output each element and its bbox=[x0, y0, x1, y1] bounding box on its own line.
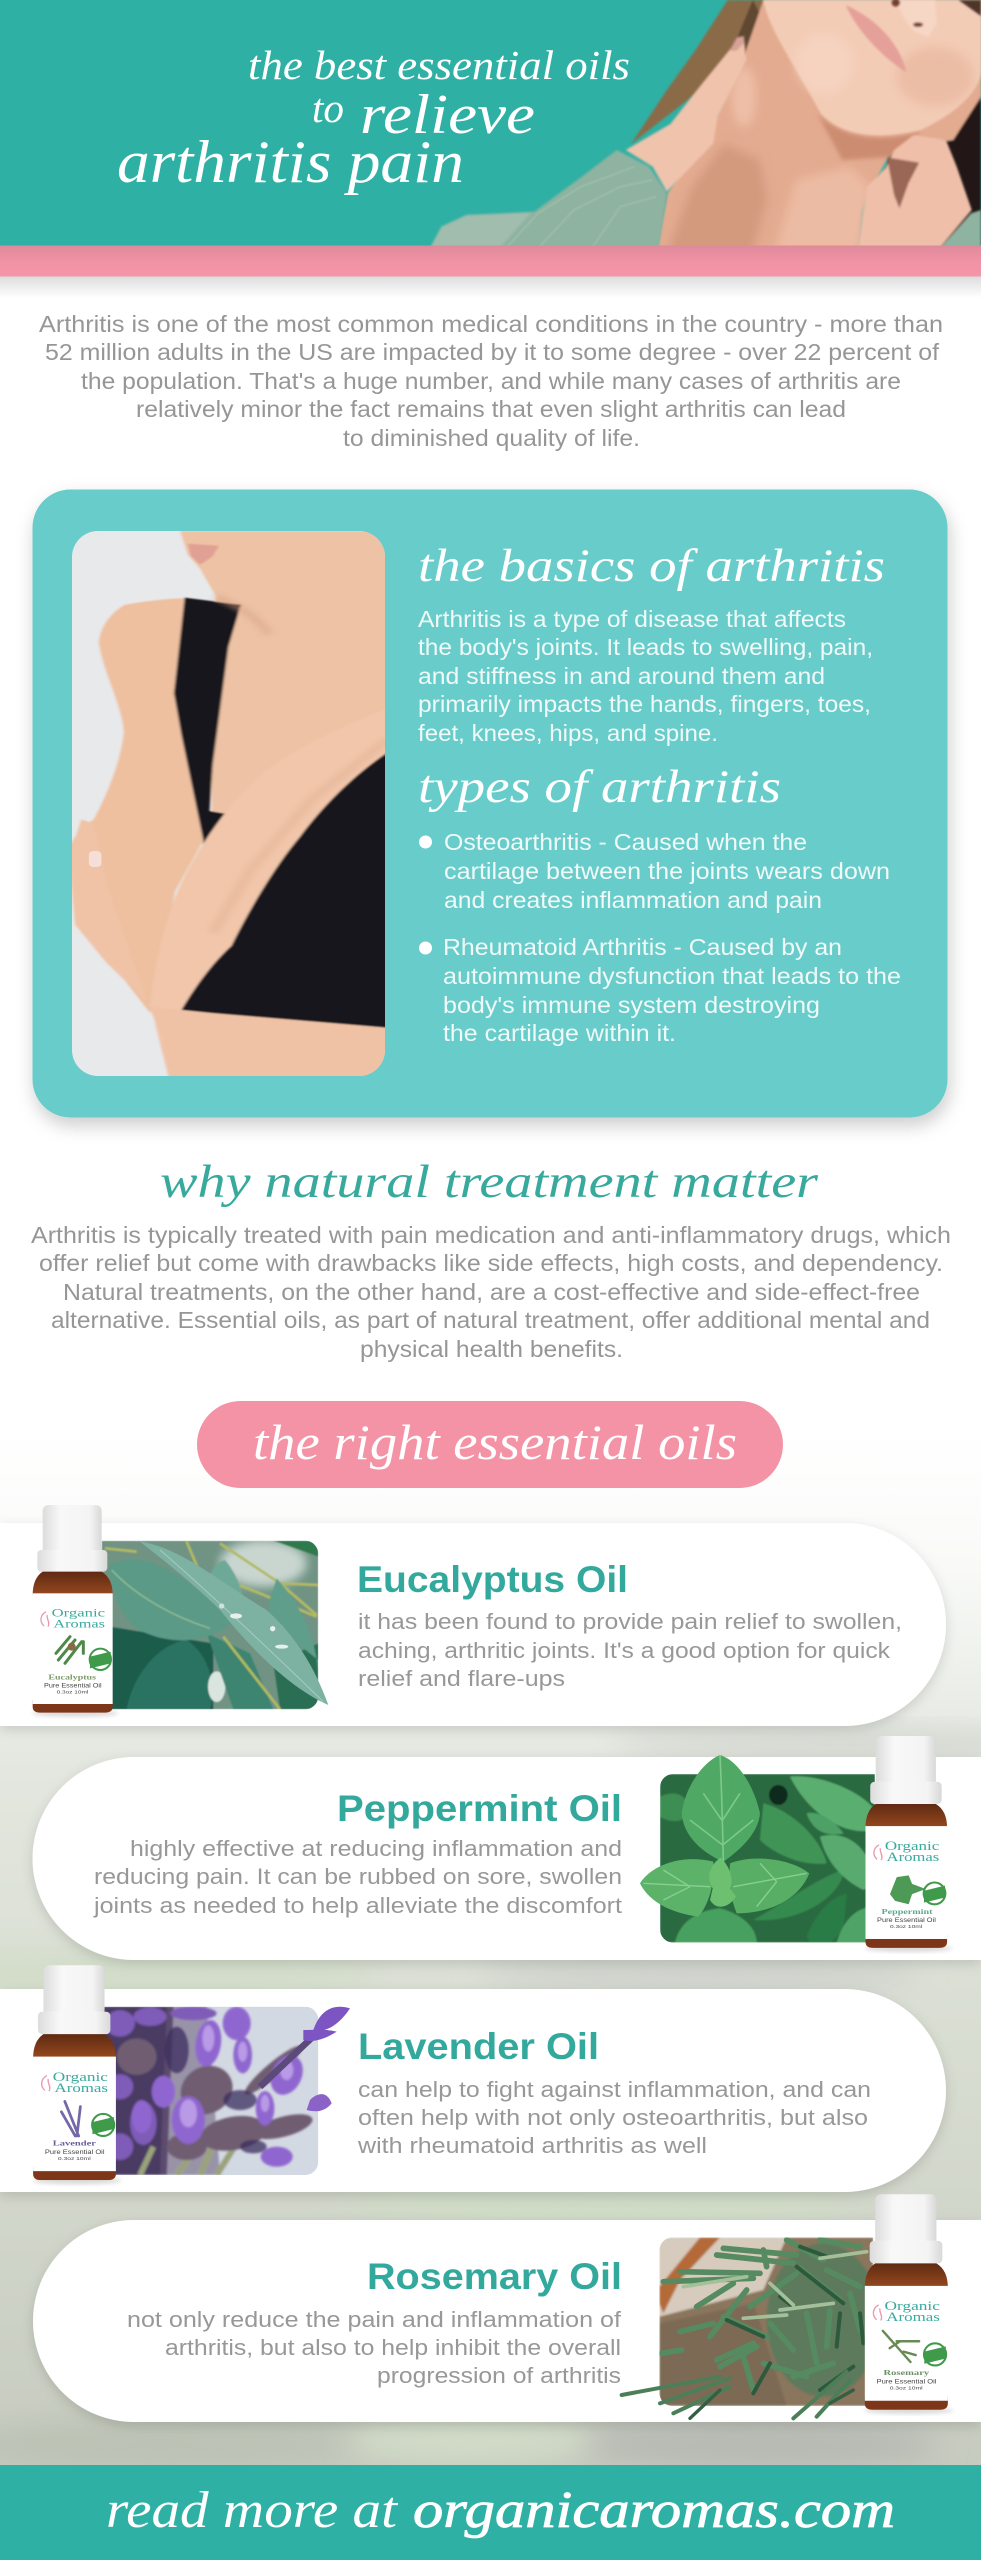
heading: the basics of arthritis: the basics of arthritis bbox=[418, 540, 885, 592]
description: eucalyptus oil: it has been found to provide pain relief to swollen, bbox=[358, 1609, 902, 1634]
bottle: eucalyptus: Pure Essential Oil bbox=[44, 1682, 102, 1689]
title: eucalyptus oil: Eucalyptus Oil bbox=[357, 1559, 628, 1600]
description: rosemary oil: arthritis, but also to help inhibit the overall bbox=[165, 2335, 621, 2360]
basics paragraph: feet, knees, hips, and spine. bbox=[418, 720, 718, 746]
intro paragraph: the population. That's a huge number, and while many cases of arthritis are bbox=[81, 368, 901, 394]
basics paragraph: the body's joints. It leads to swelling, pain, bbox=[418, 634, 873, 660]
natural treatment paragraph bbox=[31, 1222, 951, 1362]
bottle: eucalyptus: 0.3oz 10ml bbox=[57, 1689, 88, 1694]
bottle: lavender: Aromas bbox=[54, 2081, 108, 2095]
bullet: rheumatoid arthritis: body's immune system destroying bbox=[443, 992, 820, 1018]
bottle: eucalyptus: Aromas bbox=[53, 1616, 105, 1630]
bottle: lavender: Lavender bbox=[53, 2139, 97, 2148]
natural treatment paragraph: physical health benefits. bbox=[360, 1336, 623, 1362]
title: lavender oil: Lavender Oil bbox=[358, 2026, 599, 2067]
description: rosemary oil: not only reduce the pain and inflammation of bbox=[127, 2307, 622, 2332]
card: peppermint oil bbox=[32, 1736, 981, 1960]
bullet: osteoarthritis: and creates inflammation and pain bbox=[444, 887, 822, 913]
photo: lavender flowers bbox=[103, 2007, 350, 2175]
intro paragraph: relatively minor the fact remains that even slight arthritis can lead bbox=[136, 396, 846, 422]
bullet: osteoarthritis: Osteoarthritis - Caused when the bbox=[444, 829, 807, 855]
basics paragraph: and stiffness in and around them and bbox=[418, 663, 825, 689]
description: lavender oil: with rheumatoid arthritis as well bbox=[357, 2133, 707, 2158]
bottle: rosemary bbox=[864, 2194, 954, 2414]
photo: rosemary sprigs bbox=[622, 2194, 954, 2418]
footer call to action: read more at bbox=[106, 2482, 399, 2539]
header title: the best essential oils bbox=[248, 42, 630, 88]
bullet: rheumatoid arthritis: autoimmune dysfunction that leads to the bbox=[443, 963, 901, 989]
card: rosemary oil bbox=[33, 2194, 981, 2422]
description: rosemary oil: progression of arthritis bbox=[377, 2363, 621, 2388]
description: peppermint oil: reducing pain. It can be rubbed on sore, swollen bbox=[94, 1864, 622, 1889]
photo: woman holding elbow bbox=[69, 531, 388, 1080]
intro paragraph: to diminished quality of life. bbox=[343, 425, 640, 451]
description: lavender oil: can help to fight against inflammation, and can bbox=[358, 2077, 871, 2102]
bottle: rosemary: Organic bbox=[885, 2299, 941, 2313]
header title: relieve bbox=[360, 84, 535, 146]
bottle: eucalyptus: Eucalyptus bbox=[48, 1672, 96, 1681]
description: lavender oil: often help with not only osteoarthritis, but also bbox=[358, 2105, 868, 2130]
description: eucalyptus oil: aching, arthritic joints. It's a good option for quick bbox=[358, 1638, 891, 1663]
intro paragraph bbox=[39, 311, 943, 451]
natural treatment paragraph: alternative. Essential oils, as part of natural treatment, offer additional mental and bbox=[51, 1307, 930, 1333]
bottle: peppermint: Pure Essential Oil bbox=[877, 1917, 936, 1924]
description: peppermint oil: joints as needed to help alleviate the discomfort bbox=[93, 1893, 623, 1918]
basics paragraph: Arthritis is a type of disease that affects bbox=[418, 606, 846, 632]
footer call to action: organicaromas.com bbox=[413, 2482, 895, 2539]
bottle: rosemary: Aromas bbox=[886, 2310, 940, 2324]
natural treatment paragraph: Natural treatments, on the other hand, are a cost-effective and side-effect-free bbox=[63, 1279, 920, 1305]
card: eucalyptus oil bbox=[0, 1505, 946, 1726]
panel: basics and types of arthritis bbox=[32, 490, 948, 1118]
header title bbox=[117, 42, 630, 195]
bottle: peppermint: Peppermint bbox=[881, 1907, 933, 1916]
header banner bbox=[0, 0, 981, 253]
bottle: eucalyptus bbox=[32, 1505, 118, 1717]
header title: arthritis pain bbox=[117, 129, 464, 195]
description: peppermint oil: highly effective at reducing inflammation and bbox=[130, 1836, 622, 1861]
bottle: lavender: Organic bbox=[53, 2070, 109, 2084]
title: rosemary oil: Rosemary Oil bbox=[367, 2256, 622, 2297]
natural treatment paragraph: Arthritis is typically treated with pain medication and anti-inflammatory drugs, which bbox=[31, 1222, 951, 1248]
bullet: rheumatoid arthritis bbox=[419, 934, 901, 1046]
bottle: rosemary: 0.3oz 10ml bbox=[890, 2386, 923, 2392]
description: eucalyptus oil bbox=[358, 1609, 902, 1691]
heading: why natural treatment matter: why natural treatment matter bbox=[160, 1156, 819, 1208]
bottle: lavender: Pure Essential Oil bbox=[45, 2149, 105, 2156]
footer banner bbox=[0, 2465, 981, 2560]
pink band bbox=[0, 246, 981, 298]
heading: types of arthritis: types of arthritis bbox=[418, 761, 781, 813]
photo: eucalyptus leaves bbox=[102, 1540, 328, 1709]
bottle: lavender bbox=[32, 1965, 122, 2184]
title: peppermint oil: Peppermint Oil bbox=[337, 1788, 622, 1829]
header photo: woman holding neck bbox=[427, 0, 981, 253]
description: peppermint oil bbox=[93, 1836, 623, 1918]
intro paragraph: Arthritis is one of the most common medical conditions in the country - more than bbox=[39, 311, 943, 337]
bullet: osteoarthritis: cartilage between the joints wears down bbox=[444, 858, 890, 884]
footer call to action bbox=[106, 2482, 895, 2539]
pill heading: the right essential oils bbox=[197, 1401, 783, 1488]
pill heading: the right essential oils: the right essential oils bbox=[253, 1414, 737, 1470]
bottle: rosemary: Rosemary bbox=[883, 2368, 929, 2377]
photo: peppermint leaves bbox=[640, 1736, 953, 1952]
bottle: lavender: 0.3oz 10ml bbox=[58, 2156, 91, 2162]
basics paragraph: primarily impacts the hands, fingers, toes, bbox=[418, 691, 871, 717]
bottle: peppermint: Aromas bbox=[887, 1850, 940, 1864]
bottle: peppermint: 0.3oz 10ml bbox=[890, 1924, 922, 1930]
header title: to bbox=[312, 85, 344, 131]
natural treatment paragraph: offer relief but come with drawbacks like side effects, high costs, and dependency. bbox=[39, 1250, 943, 1276]
bullet: rheumatoid arthritis: Rheumatoid Arthritis - Caused by an bbox=[443, 934, 842, 960]
intro paragraph: 52 million adults in the US are impacted by it to some degree - over 22 percent of bbox=[45, 339, 940, 365]
description: rosemary oil bbox=[127, 2307, 622, 2388]
bottle: eucalyptus: Organic bbox=[52, 1606, 105, 1620]
description: lavender oil bbox=[357, 2077, 871, 2158]
bullet: rheumatoid arthritis: the cartilage within it. bbox=[443, 1020, 676, 1046]
bottle: peppermint bbox=[864, 1736, 953, 1952]
basics paragraph bbox=[418, 606, 873, 746]
bullet: osteoarthritis bbox=[419, 829, 890, 913]
bottle: peppermint: Organic bbox=[885, 1839, 940, 1853]
card: lavender oil bbox=[0, 1965, 946, 2192]
bottle: rosemary: Pure Essential Oil bbox=[877, 2378, 937, 2385]
description: eucalyptus oil: relief and flare-ups bbox=[358, 1666, 565, 1691]
